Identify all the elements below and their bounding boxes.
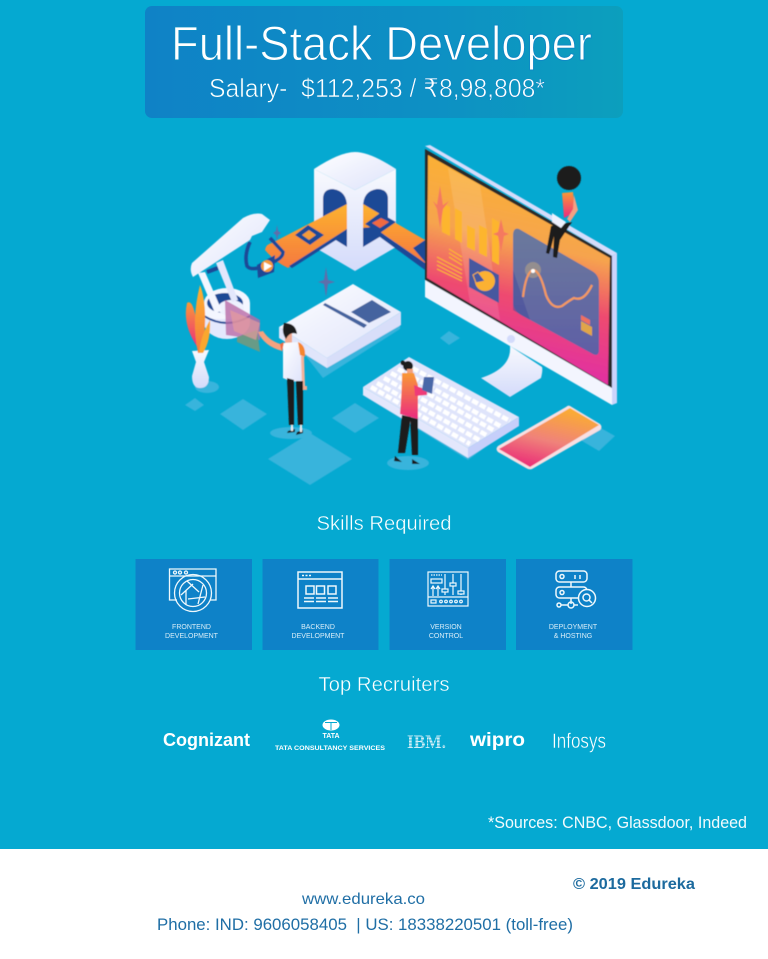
card: backend development <box>262 559 378 650</box>
pie tile <box>469 258 499 303</box>
logo: tata consultancy services: TATA CONSULTANCY SERVICES <box>275 745 386 752</box>
logo: ibm: IBM. <box>407 732 446 753</box>
card: version control: CONTROL <box>429 633 463 640</box>
man <box>258 323 307 435</box>
plant in vase <box>186 285 210 388</box>
logo: tata consultancy services <box>275 720 386 752</box>
card: backend development: DEVELOPMENT <box>292 633 345 640</box>
icon: sliders <box>428 572 468 606</box>
sparkles <box>273 225 335 297</box>
keyboard <box>363 357 519 458</box>
label: FRONTEND <box>172 624 211 631</box>
skills row <box>136 559 632 650</box>
screen <box>427 155 610 385</box>
seated figure <box>546 166 581 258</box>
card: frontend development: DEVELOPMENT <box>165 633 219 640</box>
robot arm <box>191 214 283 339</box>
logo: tata consultancy services: TATA <box>322 733 340 740</box>
bar chart <box>442 203 499 265</box>
monitor <box>425 145 617 405</box>
footer <box>0 849 768 959</box>
line graph <box>525 262 541 278</box>
icon: layout window <box>298 572 342 608</box>
book / box <box>279 284 401 368</box>
sparkles <box>433 186 509 252</box>
logo: wipro: wipro <box>469 730 525 751</box>
tower <box>314 152 396 271</box>
website: www.edureka.co <box>301 891 425 908</box>
card: frontend development <box>136 559 252 650</box>
phone: Phone: IND: 9606058405 | US: 18338220501 (toll-free) <box>157 916 573 934</box>
graph panel <box>513 229 599 355</box>
heading: top recruiters: Top Recruiters <box>318 674 450 696</box>
sources note: *Sources: CNBC, Glassdoor, Indeed <box>488 814 747 832</box>
salary: Salary- $112,253 / ₹8,98,808* <box>209 73 545 103</box>
header banner <box>145 6 623 118</box>
holographic panels <box>225 300 260 352</box>
label: VERSION <box>430 624 462 631</box>
icon: aperture window <box>170 569 216 612</box>
copyright: © 2019 Edureka <box>573 876 695 893</box>
monitor stand <box>481 346 542 397</box>
isometric illustration <box>185 145 617 485</box>
card: deployment and hosting: & HOSTING <box>554 633 592 640</box>
floor tiles <box>185 320 615 485</box>
label: DEPLOYMENT <box>549 624 598 631</box>
recruiter logos <box>163 720 606 753</box>
phone <box>496 406 602 469</box>
title: Full-Stack Developer <box>171 18 592 71</box>
logo: infosys: Infosys <box>552 730 606 753</box>
logo: cognizant: Cognizant <box>163 730 250 750</box>
label: BACKEND <box>301 624 335 631</box>
text lines <box>437 249 462 281</box>
icon: servers and search <box>556 571 596 608</box>
woman <box>394 360 434 464</box>
card: version control <box>390 559 506 650</box>
heading: skills required: Skills Required <box>316 513 452 535</box>
conveyor belt <box>265 204 425 270</box>
card: deployment and hosting <box>516 559 632 650</box>
